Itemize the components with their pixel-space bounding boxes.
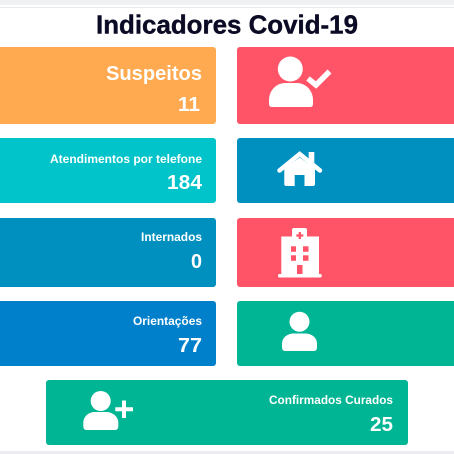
panel: internados (0, 218, 216, 287)
panel: orientações: 77 (178, 335, 202, 357)
panel: atendimentos por telefone (0, 138, 216, 203)
icon: house (280, 152, 320, 186)
panel: suspeitos: Suspeitos (106, 63, 202, 85)
icon: user with check mark (269, 56, 330, 107)
icon: user (282, 312, 317, 351)
panel: suspeitos (0, 47, 216, 124)
panel: green user (237, 301, 454, 366)
icon: hospital (278, 228, 322, 278)
panel: internados: 0 (191, 251, 202, 273)
panel: orientações (0, 301, 216, 366)
panel: red hospital (237, 218, 454, 287)
panel: red user check (237, 47, 454, 124)
panel: confirmados curados (46, 380, 408, 445)
panel: atendimentos por telefone: Atendimentos por telefone (50, 152, 202, 166)
panel: suspeitos: 11 (178, 94, 200, 116)
panel: internados: Internados (141, 230, 202, 244)
panel: blue house (237, 138, 454, 203)
panel: confirmados curados: Confirmados Curados (269, 393, 393, 407)
panel: atendimentos por telefone: 184 (167, 172, 203, 194)
title: Indicadores Covid-19 (96, 10, 358, 40)
panel: orientações: Orientações (133, 314, 202, 328)
icon: user with plus (83, 391, 133, 430)
panel: confirmados curados: 25 (370, 414, 393, 436)
